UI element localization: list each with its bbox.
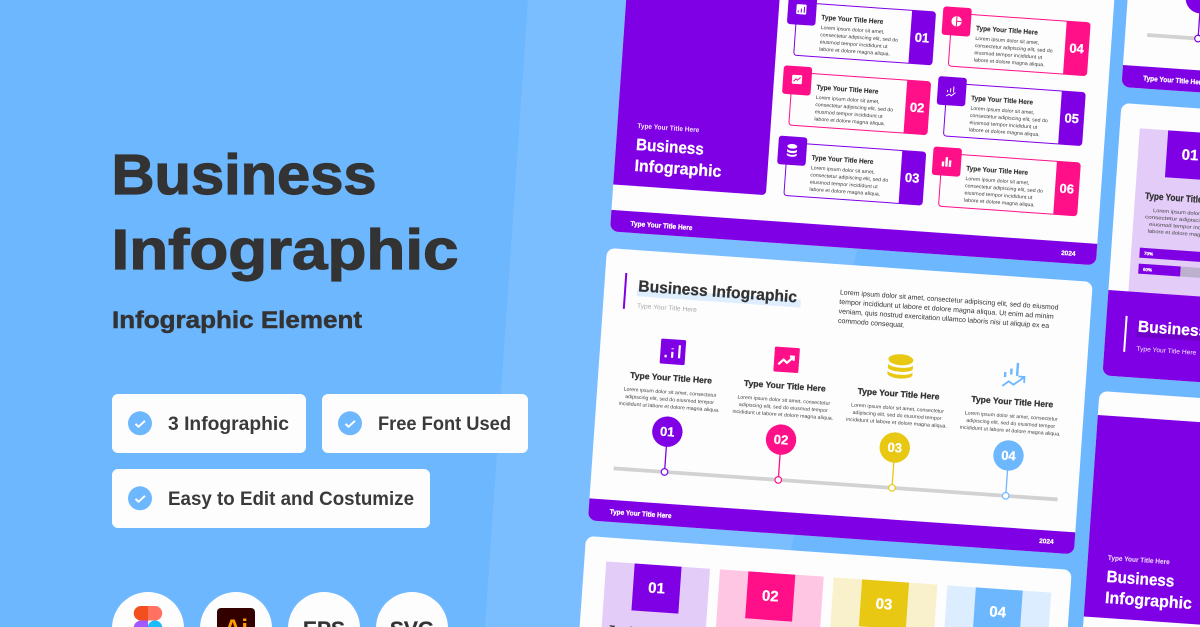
step 01 (614, 336, 724, 479)
slide: timeline (588, 248, 1093, 554)
column 04 (936, 585, 1051, 627)
slide heading: Type Your Title Here (637, 303, 697, 314)
column 04: 04 (989, 603, 1007, 622)
item 05: Lorem ipsum dolor sit amet, (970, 106, 1034, 116)
step 04: Type Your Title Here (971, 394, 1054, 410)
step 03: 03 (887, 440, 903, 456)
step 04: Lorem ipsum dolor sit amet, consectetur (965, 410, 1058, 423)
slide heading (623, 273, 802, 321)
left title panel: Business (1106, 568, 1175, 591)
item 05 (934, 76, 1086, 146)
column 01 detail: 70% (1144, 251, 1153, 257)
item 01: Lorem ipsum dolor sit amet, (820, 25, 885, 35)
column 01 detail: 01 (1181, 146, 1199, 164)
step 01: Lorem ipsum dolor sit amet, consectetur (623, 387, 717, 399)
feature pill: Easy to Edit and Costumize: Easy to Edit and Costumize (168, 489, 414, 510)
step 03: adipiscing elit, sed do eiusmod tempor (852, 410, 942, 422)
item 03 (775, 136, 926, 205)
footer bar (610, 210, 1097, 265)
item 01: consectetur adipiscing elit, sed do (820, 32, 898, 44)
item 03: labore et dolore magna aliqua. (809, 187, 880, 198)
step 02 (728, 344, 838, 487)
item 01: 01 (914, 30, 930, 46)
footer bar: 2024 (1039, 538, 1054, 546)
intro paragraph: Lorem ipsum dolor sit amet, consectetur adipiscing elit, sed do eiusmod (840, 289, 1059, 312)
item 04: Lorem ipsum dolor sit amet, (975, 36, 1039, 46)
item 02: consectetur adipiscing elit, sed do (815, 102, 894, 113)
item 01 (785, 0, 936, 65)
slide: detail panel, right column (cropped) (1102, 103, 1200, 409)
footer bar (588, 498, 1075, 554)
item 04: consectetur adipiscing elit, sed do (975, 43, 1053, 54)
left title panel: Type Your Title Here (1108, 555, 1170, 566)
step 04: adipiscing elit, sed do eiusmod tempor (966, 418, 1056, 430)
icon: Figma badge (112, 592, 184, 627)
item 01: eiusmod tempor incididunt ut (819, 39, 888, 50)
step 03: Lorem ipsum dolor sit amet, consectetur (851, 402, 944, 415)
step 02: incididunt ut labore et dolore magna aliqua. (732, 409, 833, 422)
item 02 (780, 65, 931, 135)
column 01 detail (1128, 128, 1200, 305)
item 03: Type Your Title Here (811, 155, 874, 166)
item 04: labore et dolore magna aliqua. (974, 57, 1045, 68)
bottom title panel (1102, 290, 1200, 409)
icon: EPS badge (288, 592, 360, 627)
step 01: adipiscing elit, sed do eiusmod tempor (625, 394, 714, 406)
item 06 (930, 146, 1081, 216)
subtitle: Infographic Element (112, 307, 362, 334)
column 01: 01 (648, 579, 665, 598)
column 01 (595, 561, 710, 627)
intro paragraph: veniam, quis nostrud exercitation ullamco laboris nisi ut aliquip ex ea (838, 308, 1049, 330)
column 03: 03 (875, 595, 893, 614)
item 06: Type Your Title Here (966, 166, 1028, 177)
item 06: consectetur adipiscing elit, sed do (965, 183, 1043, 195)
icon: SVG badge (376, 592, 448, 627)
column 02 (709, 569, 824, 627)
column 02: 02 (761, 587, 779, 606)
icon: Adobe Illustrator badge (200, 592, 272, 627)
timeline track (1147, 33, 1200, 68)
left title panel: Infographic (634, 157, 722, 181)
intro paragraph (838, 289, 1059, 340)
item 02: Lorem ipsum dolor sit amet, (816, 95, 880, 105)
step 04: 04 (1001, 448, 1017, 464)
item 02: eiusmod tempor incididunt ut (815, 109, 883, 120)
item 05: 05 (1064, 110, 1079, 126)
left title panel: Business (635, 136, 705, 159)
item 06: eiusmod tempor incididunt ut (964, 190, 1033, 201)
footer bar: Type Your Title Here (609, 509, 672, 520)
item 06: Lorem ipsum dolor sit amet, (965, 176, 1030, 186)
item 04 (939, 6, 1091, 76)
item 01: Type Your Title Here (821, 15, 884, 26)
step 03 (841, 351, 952, 495)
slide: title cover, right column (cropped) (1080, 391, 1200, 627)
slide: timeline, right column (cropped) (1121, 0, 1200, 121)
item 04: 04 (1069, 40, 1085, 56)
item 03: consectetur adipiscing elit, sed do (810, 172, 889, 184)
timeline track (614, 467, 1058, 501)
step 01: Type Your Title Here (630, 370, 713, 386)
feature pill: Free Font Used (322, 394, 528, 453)
left title panel: Infographic (1104, 589, 1192, 613)
feature pill: 3 Infographic: 3 Infographic (168, 414, 289, 435)
item 06: labore et dolore magna aliqua. (964, 198, 1035, 208)
left title panel (613, 0, 780, 195)
step 03: incididunt ut labore et dolore magna aliqua. (846, 417, 947, 430)
main title (112, 143, 458, 282)
step 01: 01 (660, 424, 675, 440)
item 03: Lorem ipsum dolor sit amet, (811, 165, 875, 176)
item 02: 02 (909, 99, 925, 115)
slide heading: Business Infographic (638, 278, 798, 306)
column 03 (823, 577, 937, 627)
step 02: 02 (773, 432, 789, 448)
item 03: eiusmod tempor incididunt ut (810, 180, 879, 190)
feature pill: Easy to Edit and Costumize (112, 469, 430, 528)
step 03: Type Your Title Here (857, 386, 940, 402)
item 05: labore et dolore magna aliqua. (969, 127, 1040, 138)
item 05: Type Your Title Here (971, 95, 1033, 107)
item 06: 06 (1059, 181, 1075, 197)
item 02: Type Your Title Here (816, 84, 879, 96)
step 01 marker (1183, 0, 1200, 43)
step 04: incididunt ut labore et dolore magna aliqua. (960, 425, 1061, 438)
item 05: eiusmod tempor incididunt ut (969, 120, 1038, 131)
item 01: labore et dolore magna aliqua. (819, 47, 890, 58)
left title panel (1084, 415, 1200, 627)
left title panel: Type Your Title Here (637, 123, 700, 134)
item 02: labore et dolore magna aliqua. (814, 116, 885, 127)
bottom title panel: Type Your Title Here (1136, 346, 1197, 357)
intro paragraph: tempor incididunt ut labore et dolore magna aliqua. Ut enim ad minim (839, 299, 1054, 321)
item 03: 03 (904, 170, 920, 186)
step 01: incididunt ut labore et dolore magna aliqua. (618, 401, 720, 414)
step 02: Type Your Title Here (744, 378, 826, 394)
footer bar: Type Your Title Here (630, 221, 693, 232)
feature pill: 3 Infographic (112, 394, 306, 453)
step 02: Lorem ipsum dolor sit amet, consectetur (737, 394, 831, 407)
main title: Business (112, 143, 376, 207)
footer bar (1121, 65, 1200, 121)
slide: four columns (567, 536, 1072, 627)
slide: six-item list (610, 0, 1115, 265)
column 01 detail: 60% (1143, 267, 1152, 273)
main title: Infographic (112, 218, 458, 282)
footer bar: 2024 (1061, 250, 1076, 258)
intro paragraph: commodo consequat. (838, 318, 905, 329)
feature pill: Free Font Used: Free Font Used (378, 414, 511, 435)
item 04: Type Your Title Here (976, 25, 1038, 37)
item 05: consectetur adipiscing elit, sed do (970, 113, 1048, 124)
step 02: adipiscing elit, sed do eiusmod tempor (739, 402, 828, 414)
step 04 (955, 359, 1065, 503)
item 04: eiusmod tempor incididunt ut (974, 50, 1043, 61)
